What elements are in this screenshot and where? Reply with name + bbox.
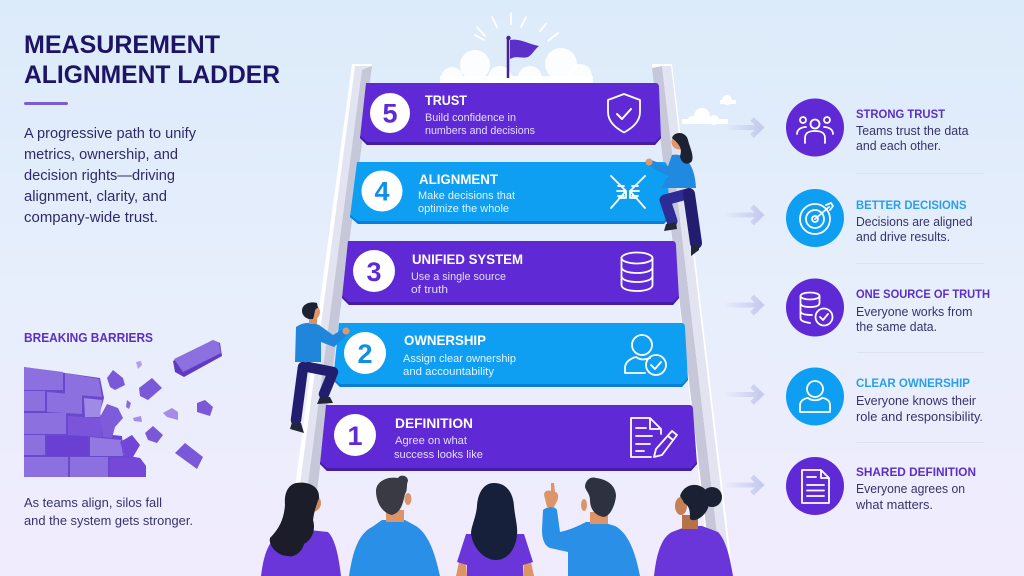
intro paragraph: alignment, clarity, and bbox=[24, 189, 167, 205]
outcome: strong trust: STRONG TRUST bbox=[856, 107, 946, 121]
breaking barriers heading: BREAKING BARRIERS bbox=[24, 331, 153, 345]
rung 5: trust bbox=[360, 83, 661, 145]
title underline bbox=[24, 102, 68, 105]
intro paragraph: company-wide trust. bbox=[24, 210, 158, 226]
rung 3: unified system: 3 bbox=[366, 257, 382, 287]
icon: shield bbox=[608, 94, 640, 132]
icon: user with check bbox=[625, 335, 666, 375]
rung 4: alignment: optimize the whole bbox=[418, 203, 509, 215]
outcome: one source of truth: Everyone works from bbox=[856, 305, 972, 319]
breaking barriers caption: As teams align, silos fall bbox=[24, 496, 162, 510]
rung 1: definition: Agree on what bbox=[395, 435, 467, 447]
rung 5: trust: numbers and decisions bbox=[425, 125, 535, 137]
figure: woman with purple shirt bbox=[456, 483, 534, 576]
rung 4: alignment: Make decisions that bbox=[418, 190, 515, 202]
outcome: clear ownership: CLEAR OWNERSHIP bbox=[856, 376, 970, 390]
rung 1: definition: 1 bbox=[347, 421, 363, 451]
clouds bbox=[440, 48, 593, 90]
rung 2: ownership bbox=[333, 323, 688, 387]
outcome: better decisions: Decisions are aligned bbox=[856, 215, 973, 229]
outcome: clear ownership bbox=[786, 368, 983, 426]
rung 2: ownership: 2 bbox=[357, 339, 373, 369]
intro paragraph bbox=[24, 126, 197, 226]
figure: man in blue shirt bbox=[349, 476, 440, 576]
icon: target bbox=[800, 203, 833, 234]
outcome: shared definition: Everyone agrees on bbox=[856, 482, 965, 496]
icon: database bbox=[622, 252, 652, 291]
outcome: better decisions: BETTER DECISIONS bbox=[856, 198, 966, 212]
outcome: clear ownership: role and responsibility. bbox=[856, 410, 983, 424]
intro paragraph: A progressive path to unify bbox=[24, 126, 197, 142]
rung 5: trust: 5 bbox=[382, 98, 398, 128]
rung 1: definition bbox=[320, 405, 697, 471]
breaking barriers caption bbox=[24, 496, 193, 528]
rung 4: alignment: ALIGNMENT bbox=[419, 171, 498, 187]
outcome: shared definition bbox=[786, 457, 976, 515]
outcome: better decisions: and drive results. bbox=[856, 230, 950, 244]
icon: person bbox=[800, 381, 830, 412]
rung 4: alignment: 4 bbox=[374, 176, 390, 206]
small cloud right bbox=[682, 95, 736, 125]
wall debris bbox=[100, 340, 222, 469]
ladder rails bbox=[283, 64, 733, 576]
intro paragraph: metrics, ownership, and bbox=[24, 147, 178, 163]
arrows to outcomes bbox=[724, 119, 761, 494]
rung 3: unified system: UNIFIED SYSTEM bbox=[412, 251, 523, 267]
outcome: clear ownership: Everyone knows their bbox=[856, 394, 976, 408]
rung 5: trust: Build confidence in bbox=[425, 112, 516, 124]
icon: database check bbox=[800, 292, 832, 326]
rung 2: ownership: and accountability bbox=[403, 366, 495, 378]
outcome: strong trust: and each other. bbox=[856, 139, 941, 153]
outcome: one source of truth: ONE SOURCE OF TRUTH bbox=[856, 287, 990, 301]
rung 5: trust: TRUST bbox=[425, 92, 467, 108]
rung 1: definition: DEFINITION bbox=[395, 415, 473, 431]
rung 2: ownership: Assign clear ownership bbox=[403, 353, 516, 365]
figure: woman with hair bun bbox=[654, 485, 733, 576]
outcome: shared definition: SHARED DEFINITION bbox=[856, 465, 976, 479]
icon: document with pencil bbox=[631, 418, 677, 457]
icon: team bbox=[797, 117, 833, 143]
icon: flag with rays bbox=[475, 13, 558, 78]
figure: man climbing bbox=[290, 302, 350, 433]
icon: document bbox=[802, 470, 829, 503]
intro paragraph: decision rights—driving bbox=[24, 168, 175, 184]
title bbox=[24, 31, 280, 89]
icon: crumbling brick wall bbox=[24, 340, 222, 477]
figure: man pointing upward bbox=[542, 477, 640, 576]
clouds and flag at ladder top bbox=[440, 13, 593, 90]
rung 3: unified system: Use a single source bbox=[411, 271, 506, 283]
rung 1: definition: success looks like bbox=[394, 449, 483, 461]
rung 3: unified system bbox=[342, 241, 679, 305]
icon: converging arrows bbox=[611, 176, 645, 208]
outcome: strong trust: Teams trust the data bbox=[856, 124, 969, 138]
rung 3: unified system: of truth bbox=[411, 284, 448, 296]
outcome: shared definition: what matters. bbox=[855, 498, 933, 512]
figure: woman climbing bbox=[646, 133, 699, 256]
outcome: one source of truth: the same data. bbox=[856, 320, 937, 334]
outcome: better decisions bbox=[786, 189, 973, 247]
title: MEASUREMENT bbox=[24, 31, 220, 59]
figure: woman with long hair bbox=[261, 483, 341, 576]
outcome: strong trust bbox=[786, 98, 969, 156]
rung 2: ownership: OWNERSHIP bbox=[404, 332, 486, 348]
panel: breaking barriers bbox=[24, 331, 222, 528]
title: ALIGNMENT LADDER bbox=[24, 61, 280, 89]
outcome: one source of truth bbox=[786, 278, 990, 336]
rung 4: alignment bbox=[350, 162, 670, 224]
breaking barriers caption: and the system gets stronger. bbox=[24, 514, 193, 528]
